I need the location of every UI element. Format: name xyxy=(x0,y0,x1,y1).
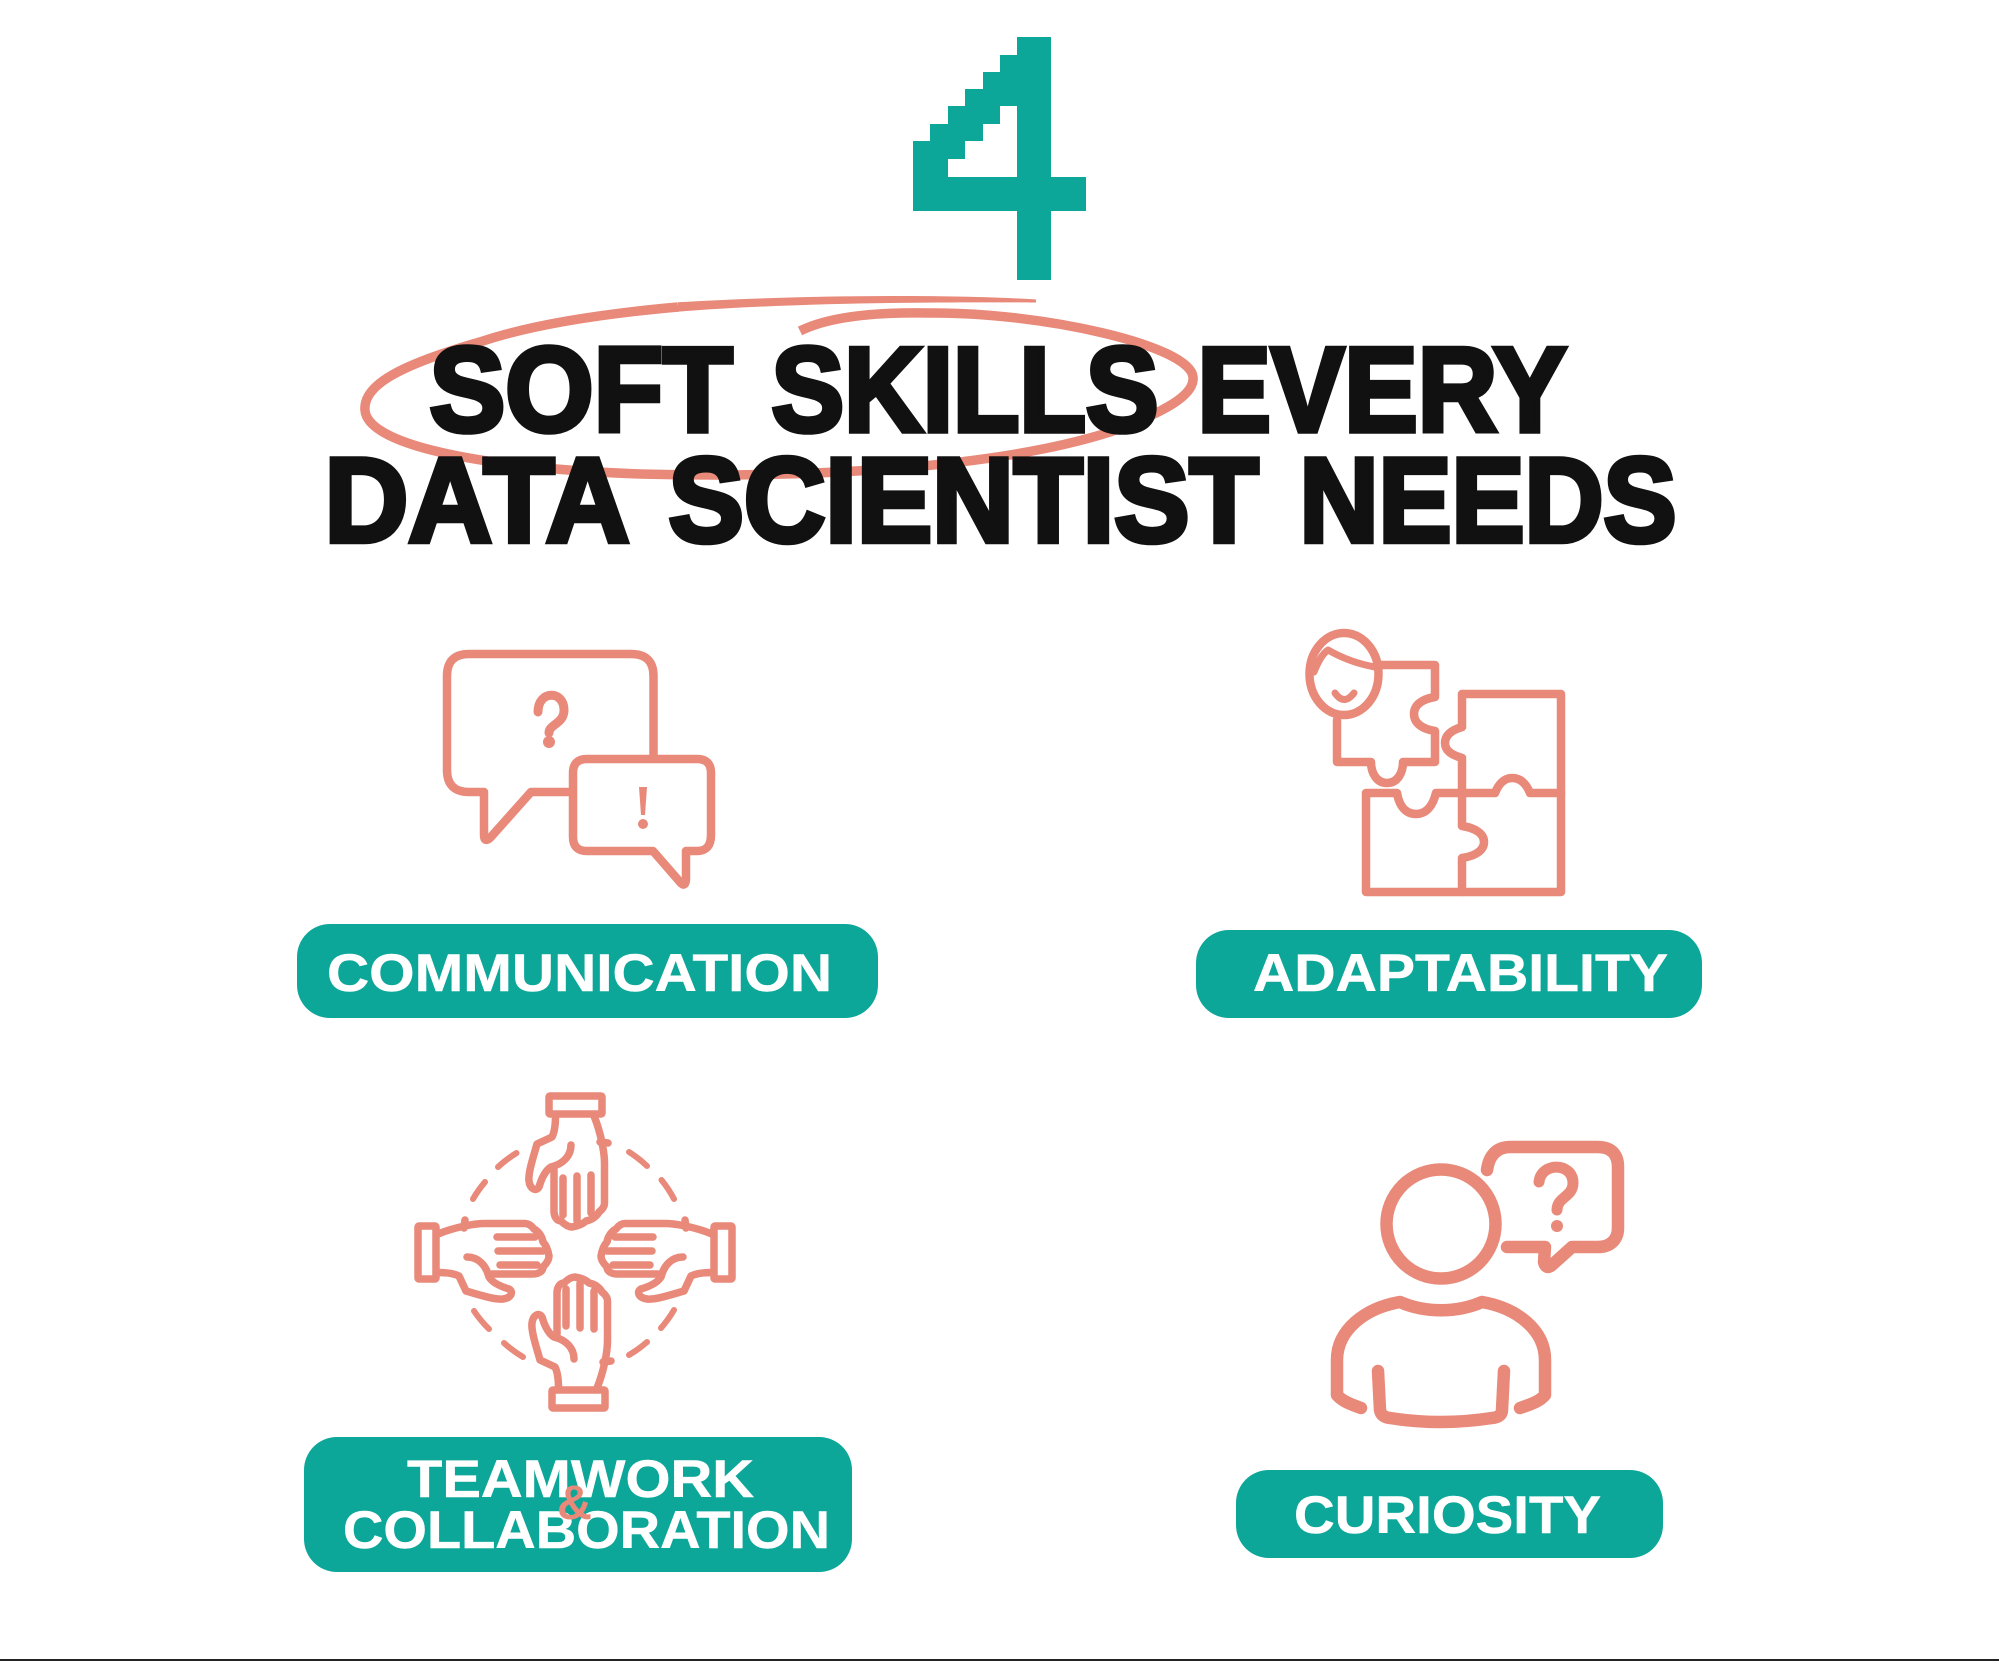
title: DATA xyxy=(324,434,630,568)
icon: four hands in dashed circle xyxy=(418,1096,732,1408)
label: teamwork and collaboration xyxy=(304,1437,852,1572)
numeral 4 xyxy=(913,37,1086,280)
label: communication xyxy=(297,924,878,1018)
label: teamwork and collaboration: COLLABORATION xyxy=(343,1501,830,1560)
title: NEEDS xyxy=(1300,434,1676,568)
label: communication: COMMUNICATION xyxy=(327,944,832,1003)
label: adaptability xyxy=(1196,930,1702,1018)
title: EVERY xyxy=(1198,323,1566,457)
label: teamwork and collaboration: & xyxy=(557,1477,592,1530)
icon: puzzle with person xyxy=(1310,633,1561,892)
title: SKILLS xyxy=(772,323,1158,457)
panel: curiosity xyxy=(1236,1147,1663,1558)
label: curiosity xyxy=(1236,1470,1663,1558)
label: teamwork and collaboration: TEAMWORK xyxy=(407,1450,754,1509)
icon: person with question bubble xyxy=(1337,1147,1618,1422)
title: SOFT xyxy=(430,323,732,457)
panel: adaptability xyxy=(1196,633,1702,1018)
panel: teamwork and collaboration xyxy=(304,1096,852,1572)
icon: speech bubbles xyxy=(447,654,711,885)
label: adaptability: ADAPTABILITY xyxy=(1253,944,1668,1003)
title: SCIENTIST xyxy=(668,434,1258,568)
panel: communication xyxy=(297,654,878,1018)
hand-drawn ellipse around SOFT SKILLS xyxy=(365,296,1193,475)
title xyxy=(324,323,1676,568)
label: curiosity: CURIOSITY xyxy=(1294,1486,1601,1545)
